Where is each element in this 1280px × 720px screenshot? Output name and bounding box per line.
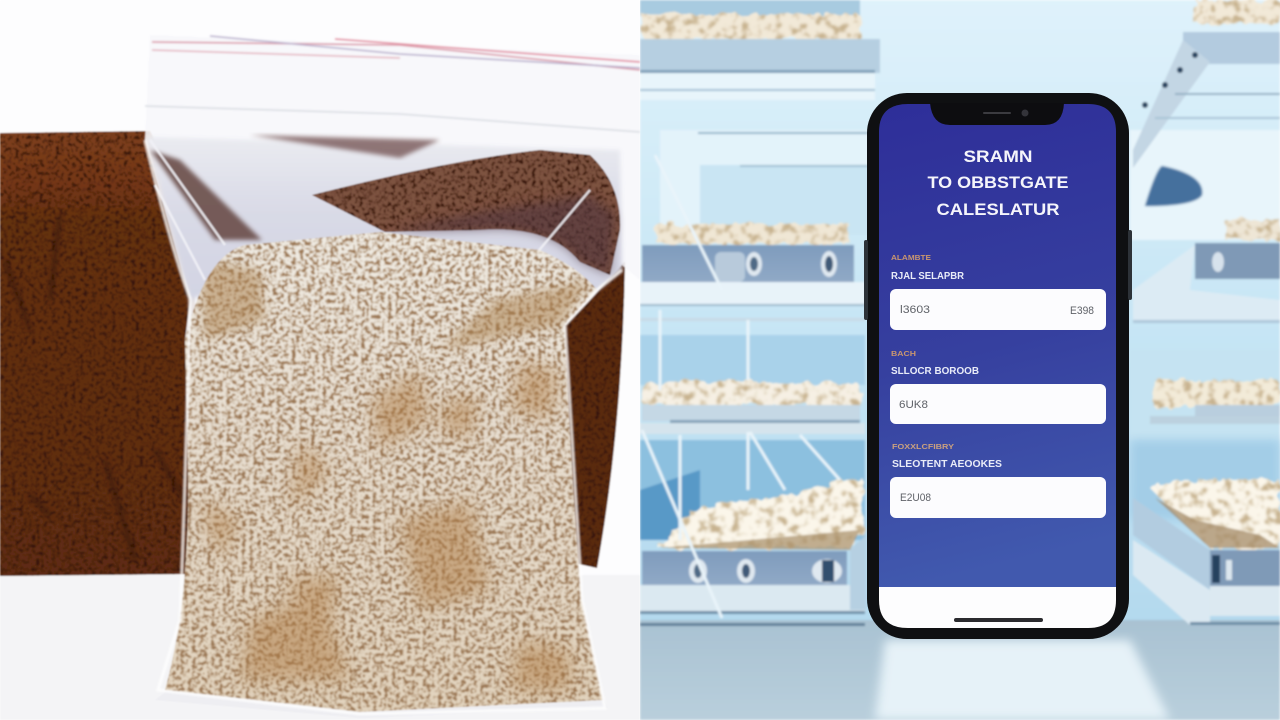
notch <box>930 103 1064 125</box>
support rods left <box>642 155 840 618</box>
field 2 <box>890 351 1106 424</box>
zip seal stripes <box>145 36 640 132</box>
smartphone <box>864 93 1132 639</box>
dark blue cloth under shelf <box>1145 166 1202 206</box>
title <box>928 147 1068 219</box>
plastic bag <box>145 35 640 718</box>
field 1: RJAL SELAPBR <box>891 271 965 282</box>
shelf tier 4 left <box>640 478 866 626</box>
field 3: SLEOTENT AEOOKES <box>892 459 1002 470</box>
shelf tier 3 left <box>640 382 865 434</box>
shelf tier 4 right <box>1133 478 1280 625</box>
field 3 <box>890 444 1106 518</box>
title: TO OBBSTGATE <box>928 173 1068 192</box>
panel: product photo, left <box>0 0 640 720</box>
coco coir brick right <box>555 262 625 568</box>
title: CALESLATUR <box>936 200 1060 219</box>
field 2: BACH <box>891 351 916 358</box>
field 1: Ɩ3603 <box>900 304 930 316</box>
bag pellet fill <box>160 225 610 715</box>
phone screen <box>879 104 1116 628</box>
field 3: FOXXLCFIBRY <box>892 444 954 451</box>
field 1 <box>890 255 1106 330</box>
bag upper translucent area <box>147 137 622 325</box>
shelf tier 1 left <box>640 0 880 167</box>
shelf tier 1 right <box>1133 0 1280 168</box>
title: SRAMN <box>964 147 1032 166</box>
field 1: E398 <box>1070 305 1094 317</box>
shelf tier 2 right <box>1133 220 1280 323</box>
shelf tier 2 left <box>640 224 865 321</box>
field 2: 6UK8 <box>899 399 928 411</box>
coco coir brick left <box>0 131 195 576</box>
field 3: E2U08 <box>900 492 931 504</box>
phone body <box>867 93 1129 639</box>
panel: grow lab background, right <box>640 0 1280 720</box>
field 2: SLLOCR BOROOB <box>891 366 979 377</box>
field 1: ALAMBTE <box>891 255 931 262</box>
shelf tier 3 right <box>1150 380 1280 424</box>
